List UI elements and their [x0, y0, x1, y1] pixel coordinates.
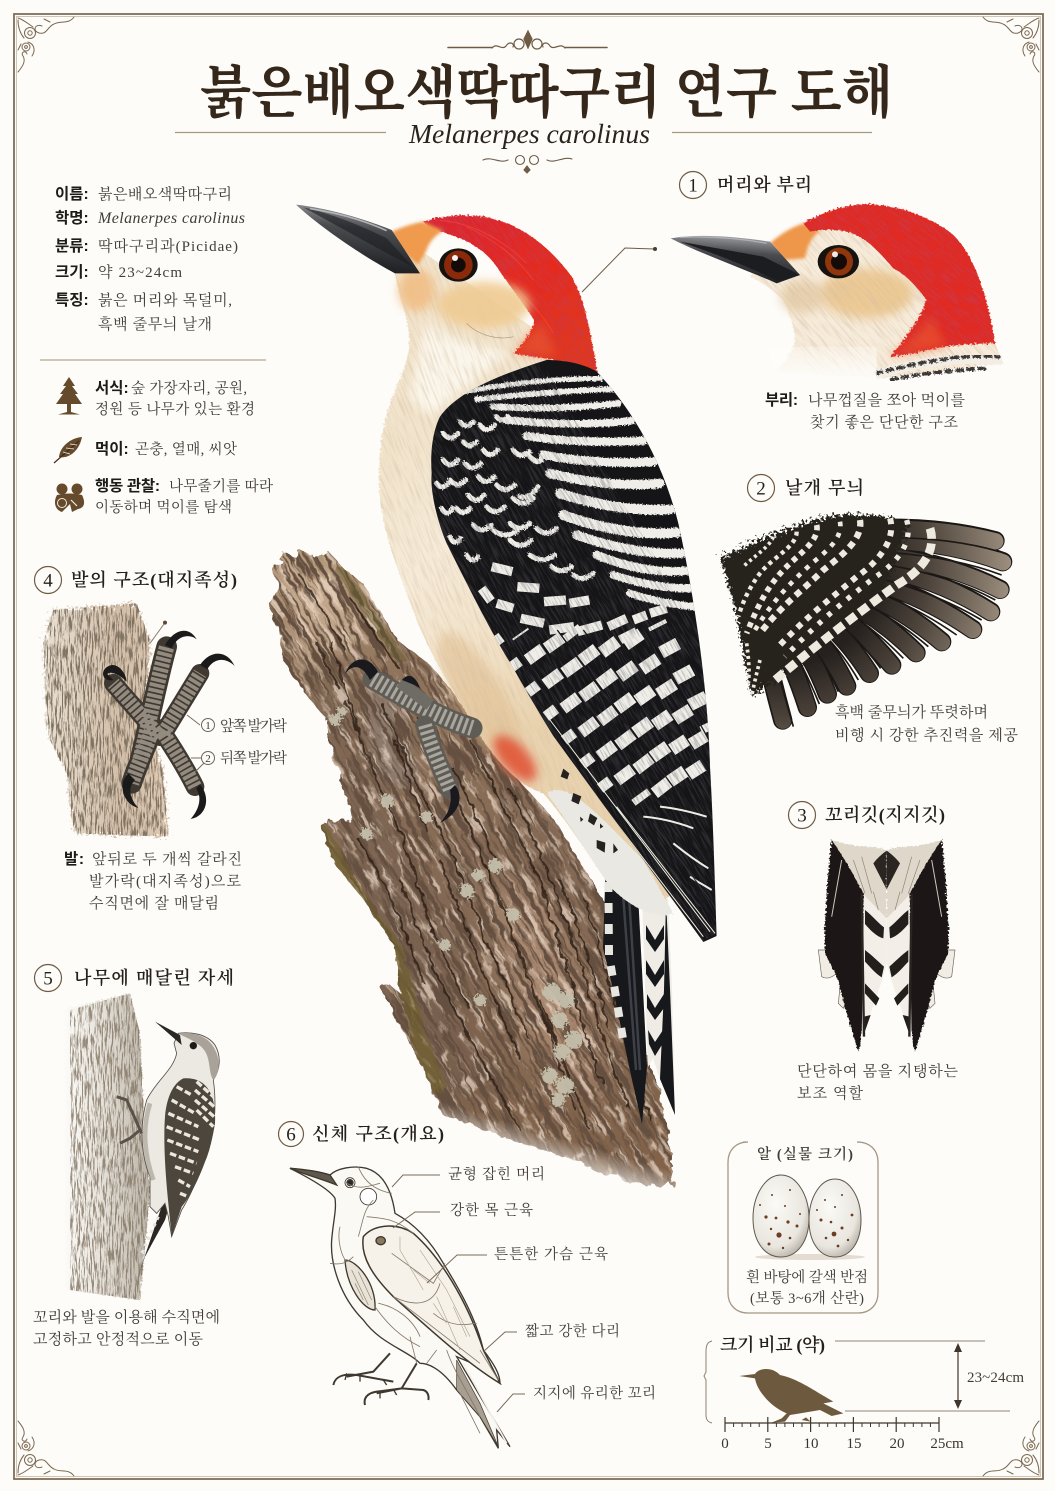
toe labels: 뒤쪽 발가락: [220, 749, 287, 767]
panel 6: body structure: [278, 1122, 656, 1448]
barred back stripes: [465, 378, 695, 607]
tail feathers: [603, 826, 675, 1124]
habitat text: 정원 등 나무가 있는 환경: [95, 400, 255, 418]
covert scallops: [437, 417, 593, 578]
toe labels: 앞쪽 발가락: [220, 717, 287, 735]
tan lower belly: [423, 621, 537, 772]
panel: species facts: 딱따구리과(Picidae): [98, 237, 238, 255]
panel: species facts: 붉은 머리와 목덜미,: [98, 291, 232, 309]
heading: 4: [43, 570, 53, 592]
habitat text: 숲 가장자리, 공원,: [131, 379, 247, 397]
ruler: 20: [890, 1436, 904, 1452]
beak caption: 찾기 좋은 단단한 구조: [810, 413, 958, 431]
beak caption: 부리:: [765, 391, 798, 409]
toe labels: [187, 715, 287, 772]
foot caption: 발:: [64, 850, 84, 868]
main illustration: woodpecker on trunk: [266, 204, 717, 1188]
heading: [748, 474, 864, 502]
heading: 3: [797, 806, 807, 826]
panel: egg size: [728, 1142, 878, 1313]
habitat text: 서식:: [95, 379, 129, 397]
posture caption: 고정하고 안정적으로 이동: [33, 1330, 204, 1348]
ruler: 5: [764, 1436, 772, 1452]
habitat text: [95, 379, 255, 418]
panel: species facts: 특징:: [55, 291, 89, 309]
eggs: [753, 1175, 865, 1260]
heading: 1: [688, 176, 698, 196]
egg caption: [746, 1268, 868, 1307]
wing: [431, 360, 717, 942]
icon: tree: [56, 377, 82, 414]
ruler: 15: [846, 1436, 862, 1452]
red cap: [422, 214, 600, 374]
tail caption: 단단하여 몸을 지탱하는: [797, 1062, 958, 1080]
subtitle with rules: Melanerpes carolinus: [408, 119, 650, 149]
illustration: claws on bark: [30, 600, 235, 840]
heading: [680, 172, 812, 198]
eye: [439, 248, 478, 282]
ruler: 10: [804, 1436, 818, 1452]
ruler: 25cm: [930, 1436, 964, 1452]
foot caption: 수직면에 잘 매달림: [89, 894, 219, 912]
anatomy labels: [392, 1165, 656, 1412]
tail caption: [797, 1062, 958, 1102]
posture caption: 꼬리와 발을 이용해 수직면에: [33, 1308, 220, 1326]
illustration: bird on trunk: [70, 993, 220, 1300]
heading: [788, 802, 945, 828]
body fur: [380, 256, 668, 904]
beak: [296, 205, 420, 273]
anatomy labels: 지지에 유리한 꼬리: [533, 1384, 656, 1402]
feet: [117, 1097, 142, 1143]
wing: [164, 1078, 215, 1237]
flank red patch: [486, 728, 544, 788]
panel: size comparison: [704, 1334, 1024, 1452]
height label: 23~24cm: [967, 1370, 1024, 1386]
toe labels: 1: [205, 720, 211, 732]
panel: species facts: [55, 185, 245, 333]
toe labels: 2: [205, 753, 211, 765]
body: [142, 1033, 219, 1237]
food text: [95, 440, 237, 458]
anatomy labels: 짧고 강한 다리: [525, 1322, 620, 1340]
feather separators: [556, 630, 709, 787]
panel 3: tail feathers: [788, 802, 958, 1102]
title: 붉은배오색딱따구리 연구 도해: [200, 62, 893, 125]
divider: [40, 359, 266, 361]
heading: 크기 비교 (약): [720, 1334, 825, 1356]
wing caption: [835, 703, 1018, 744]
height arrow: [954, 1343, 962, 1409]
panel: species facts: 분류:: [55, 237, 89, 255]
leader line to head detail: [582, 247, 657, 292]
heading: 5: [43, 968, 53, 990]
tail caption: 보조 역할: [797, 1084, 864, 1102]
illustration: anatomy line drawing: [290, 1167, 510, 1448]
lichen patches: [329, 707, 583, 1107]
cheek line: [467, 323, 513, 338]
beak caption: [765, 391, 966, 431]
behaviour text: 행동 관찰:: [95, 477, 160, 495]
height guide lines: [835, 1341, 1010, 1411]
heading: 2: [756, 478, 766, 500]
illustration: spread wing: [720, 515, 1003, 727]
anatomy labels: 균형 잡힌 머리: [448, 1165, 545, 1183]
heading: 날개 무늬: [785, 477, 864, 498]
panel 1: head and beak: [670, 170, 1004, 430]
wing bars: [482, 567, 667, 640]
wing feather texture: [432, 363, 716, 941]
panel: species facts: 흑백 줄무늬 날개: [98, 315, 212, 333]
egg caption: 흰 바탕에 갈색 반점: [746, 1268, 868, 1286]
panel: species facts: 이름:: [55, 185, 89, 203]
icon: feather: [54, 437, 82, 463]
primaries: [540, 720, 715, 937]
orange forehead: [392, 222, 443, 265]
food text: 먹이:: [95, 440, 129, 458]
body: [379, 232, 673, 909]
panel 2: wing pattern: [720, 474, 1018, 744]
ruler: 0: [721, 1436, 729, 1452]
panel 5: clinging posture: [33, 964, 234, 1348]
panel 4: foot structure: [30, 566, 287, 912]
rounded frame: [728, 1142, 878, 1313]
panel: ecology notes: [54, 377, 273, 516]
foot caption: 발가락(대지족성)으로: [89, 872, 242, 890]
checker pattern: [493, 623, 712, 800]
heading: 6: [286, 1124, 296, 1146]
heading: 발의 구조(대지족성): [71, 569, 237, 591]
panel: species facts: 학명:: [55, 209, 89, 227]
illustration: tail: [818, 840, 955, 1052]
coverts with frayed edge: [720, 515, 910, 697]
feather separations: [765, 538, 1002, 727]
gripping foot: [345, 659, 472, 823]
peach cheek: [437, 282, 530, 328]
bird silhouette: [739, 1369, 843, 1423]
anatomy labels: 강한 목 근육: [450, 1201, 533, 1219]
heading: 꼬리깃(지지깃): [825, 804, 945, 826]
behaviour text: 이동하며 먹이를 탐색: [95, 498, 232, 516]
wing caption: 흑백 줄무늬가 뚜렷하며: [835, 703, 988, 721]
tree trunk: [266, 549, 676, 1188]
behaviour text: 나무줄기를 따라: [169, 477, 273, 495]
beak caption: 나무껍질을 쪼아 먹이를: [808, 391, 966, 409]
foot caption: [64, 850, 242, 912]
heading: [34, 566, 237, 594]
panel: species facts: 약 23~24cm: [98, 263, 182, 281]
heading: 신체 구조(개요): [312, 1123, 444, 1145]
top flourish: [448, 31, 607, 49]
ruler: [721, 1417, 964, 1452]
tail: [135, 1197, 170, 1285]
heading: [278, 1122, 444, 1146]
wing caption: 비행 시 강한 추진력을 제공: [835, 726, 1018, 744]
orange chin: [398, 268, 435, 312]
posture caption: [33, 1308, 220, 1348]
foot caption: 앞뒤로 두 개씩 갈라진: [92, 850, 242, 868]
heading: [34, 964, 234, 992]
neck lightening: [410, 323, 510, 417]
anatomy labels: 튼튼한 가슴 근육: [494, 1245, 608, 1263]
egg caption: (보통 3~6개 산란): [750, 1289, 864, 1307]
egg title: 알 (실물 크기): [757, 1145, 853, 1163]
food text: 곤충, 열매, 씨앗: [135, 440, 237, 458]
bird body and head, coordinates scaled: [214, 124, 833, 983]
panel: species facts: 붉은배오색딱따구리: [98, 185, 232, 203]
panel: species facts: Melanerpes carolinus: [97, 210, 245, 227]
vent with dark markings: [547, 769, 673, 915]
heading: 머리와 부리: [717, 174, 812, 195]
lower flourish: [483, 156, 572, 173]
illustration: head: [671, 129, 1055, 466]
icon: behaviour: [55, 484, 84, 512]
bracket: [704, 1341, 712, 1423]
panel: species facts: 크기:: [55, 263, 89, 281]
behaviour text: [95, 477, 273, 516]
heading: 나무에 매달린 자세: [74, 967, 234, 988]
